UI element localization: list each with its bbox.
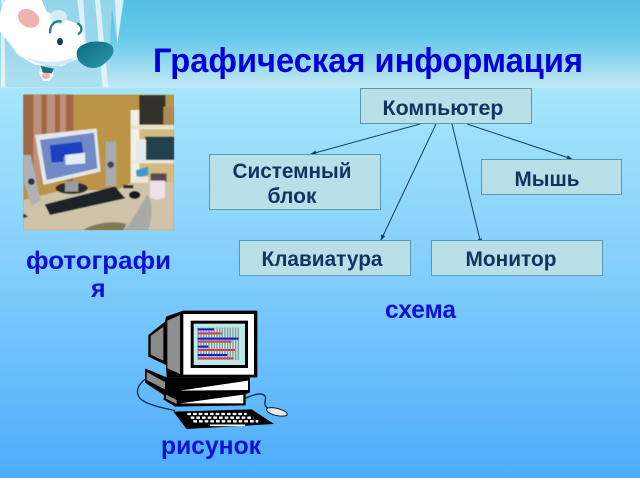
label: diagram: схема [385,296,457,324]
background: header band [0,0,640,88]
monitor back [148,311,257,377]
box: system unit: блок [268,185,317,208]
desk [23,183,174,230]
arrow: to monitor [452,124,481,244]
speakers [23,142,116,206]
photo: computer on a desk [23,95,174,230]
box: computer [360,88,532,124]
shelf [131,95,174,195]
system unit [145,368,250,407]
label: photograph: я [90,275,106,303]
box: mouse [482,160,622,194]
box: keyboard: Клавиатура [262,248,383,271]
keyboard and mouse [45,187,125,215]
title: Графическая информация [153,42,583,80]
monitor front [183,314,254,375]
box: monitor: Монитор [466,248,556,271]
screen chart [198,327,238,360]
monitor [35,128,101,194]
box: computer: Компьютер [382,97,504,120]
mouse [267,408,287,416]
label: photograph: фотографи [26,247,171,275]
box: keyboard [240,240,410,276]
chair [124,195,152,230]
icon: polar bear with icicles [0,0,124,87]
pencil cup [150,181,165,200]
arrow: to mouse [467,124,572,159]
arrow: to keyboard [381,124,436,240]
label: drawing: рисунок [161,432,261,460]
illustration: desktop computer [137,311,287,429]
box: mouse: Мышь [514,168,580,191]
arrow: to system unit [311,124,420,154]
flowchart: computer parts [210,88,622,276]
box: monitor [432,240,602,276]
cables [137,379,268,411]
curtain [23,95,73,181]
keyboard [173,409,274,429]
box: system unit: Системный [232,160,352,183]
box: system unit [210,154,380,210]
